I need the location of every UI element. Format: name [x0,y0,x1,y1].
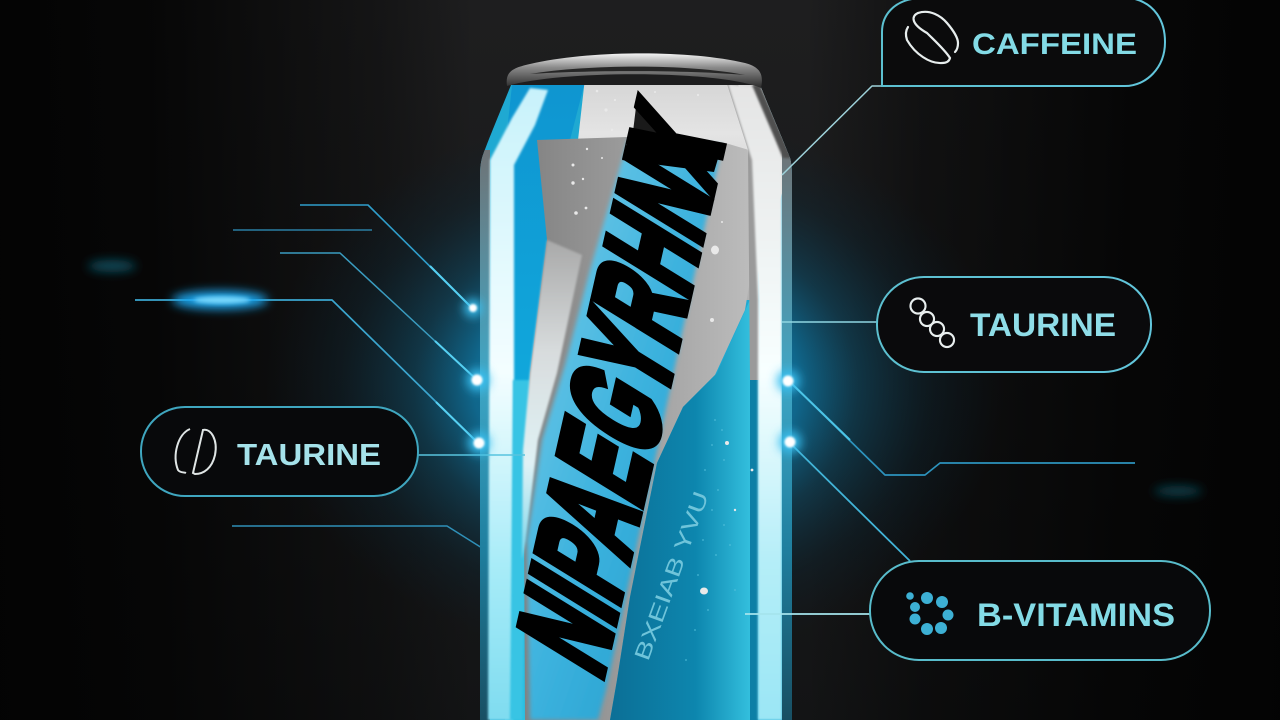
lower left cyan [510,380,530,720]
can body [480,78,794,720]
right white band [728,84,782,720]
label: b-vitamins [870,561,1210,660]
can upper silver [578,85,791,300]
upper right shadow [752,85,792,158]
label: taurine right [877,277,1151,372]
silver label [524,137,750,720]
left edge strip [480,150,490,720]
energy drink can [480,53,794,720]
left connector lines [135,205,482,548]
icon: molecule chain [910,298,954,347]
caffeine text: CAFFEINE [972,28,1137,61]
light flares [88,260,1202,496]
glowing nodes [464,299,801,454]
label: caffeine [882,0,1165,86]
right upper gray shading [727,84,760,380]
white diagonal strip [522,240,582,560]
can upper blue stripe [505,78,586,720]
icon: coffee bean [906,12,958,63]
right dark stripe [750,370,758,720]
logo text: NIPAEGYRHNX [495,80,748,698]
logo top bar [622,144,718,172]
blue panel dot texture [685,419,736,661]
icon: vitamin dots [906,592,954,635]
cyan band behind logo [527,140,722,720]
label: taurine left [141,407,418,496]
logo spike [633,110,656,133]
left white band [488,88,548,720]
taurine text left: TAURINE [237,437,381,472]
small can text: BXEIAB YVU [629,488,714,664]
right edge strip [782,150,792,720]
right and centre connector lines [418,86,1135,614]
b-vitamins text: B-VITAMINS [977,597,1175,633]
droplets [571,90,753,594]
icon: split bean [176,429,216,474]
lower deep blue panel [610,293,753,720]
can rim [507,53,762,88]
taurine text right: TAURINE [970,307,1116,343]
